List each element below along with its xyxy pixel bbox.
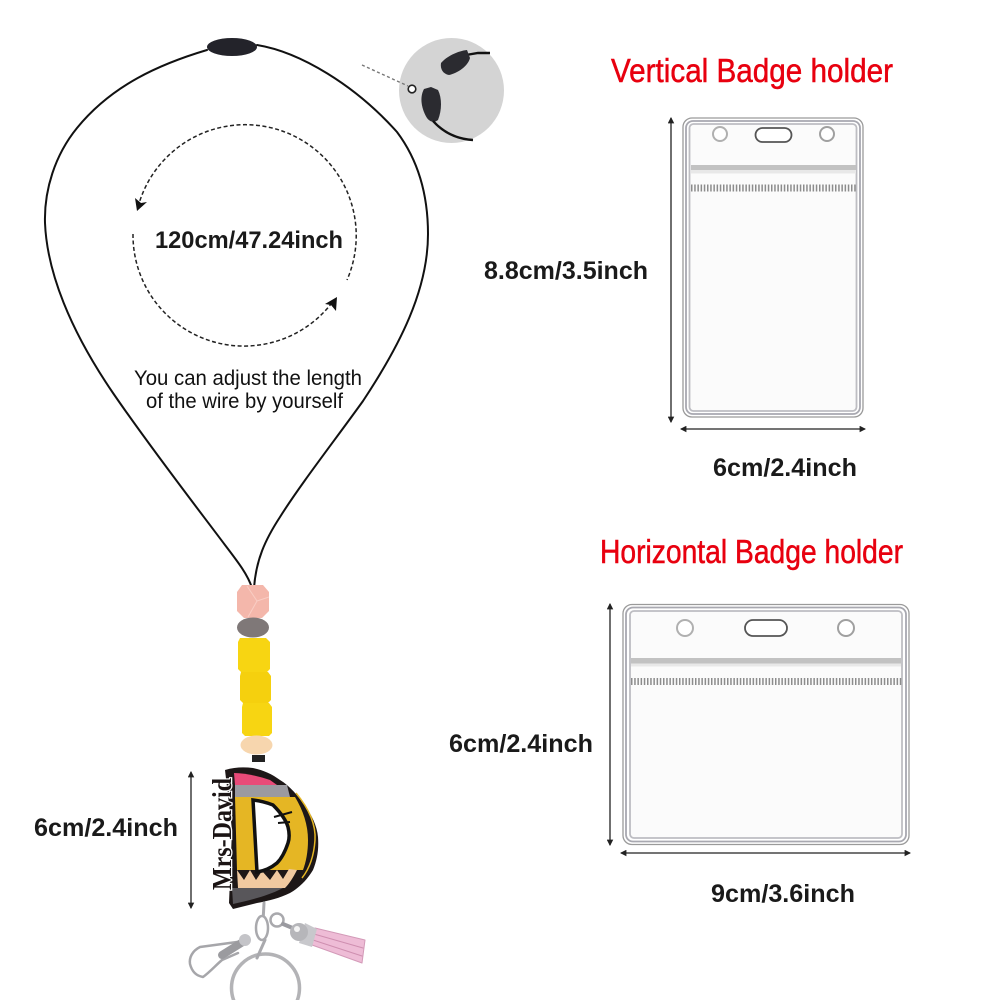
dimension: vertical badge width: 6cm/2.4inch bbox=[713, 454, 857, 482]
dashed length arc: bottom bbox=[133, 234, 331, 346]
dimension: vertical badge height: 8.8cm/3.5inch bbox=[484, 257, 648, 285]
arrowhead: top arc bbox=[135, 198, 147, 211]
badge holder: horizontal bbox=[623, 604, 909, 844]
inset: clasp detail bbox=[362, 38, 504, 143]
length label: 120cm/47.24inch bbox=[155, 228, 343, 254]
heading: horizontal badge holder: Horizontal Badge holder bbox=[600, 533, 903, 570]
pendant: letter D pencil: Mrs-David bbox=[207, 778, 237, 890]
dimension: horizontal badge width: 9cm/3.6inch bbox=[711, 880, 855, 908]
dimension: horizontal badge height: 6cm/2.4inch bbox=[449, 730, 593, 758]
badge holder: vertical bbox=[683, 118, 863, 417]
beads bbox=[237, 585, 272, 762]
adjustment note: You can adjust the length bbox=[134, 367, 362, 390]
dashed length arc: top bbox=[138, 125, 356, 280]
heading: vertical badge holder: Vertical Badge holder bbox=[611, 52, 893, 89]
adjustment note bbox=[134, 367, 362, 413]
arrowhead: bottom arc bbox=[325, 297, 337, 311]
lanyard cord bbox=[45, 45, 428, 588]
icon: adjuster clasp bbox=[207, 38, 257, 56]
pendant: letter D pencil bbox=[207, 767, 318, 909]
dimension: pendant height: 6cm/2.4inch bbox=[34, 814, 178, 842]
adjustment note: of the wire by yourself bbox=[146, 390, 343, 413]
keyring hardware bbox=[190, 903, 365, 1000]
